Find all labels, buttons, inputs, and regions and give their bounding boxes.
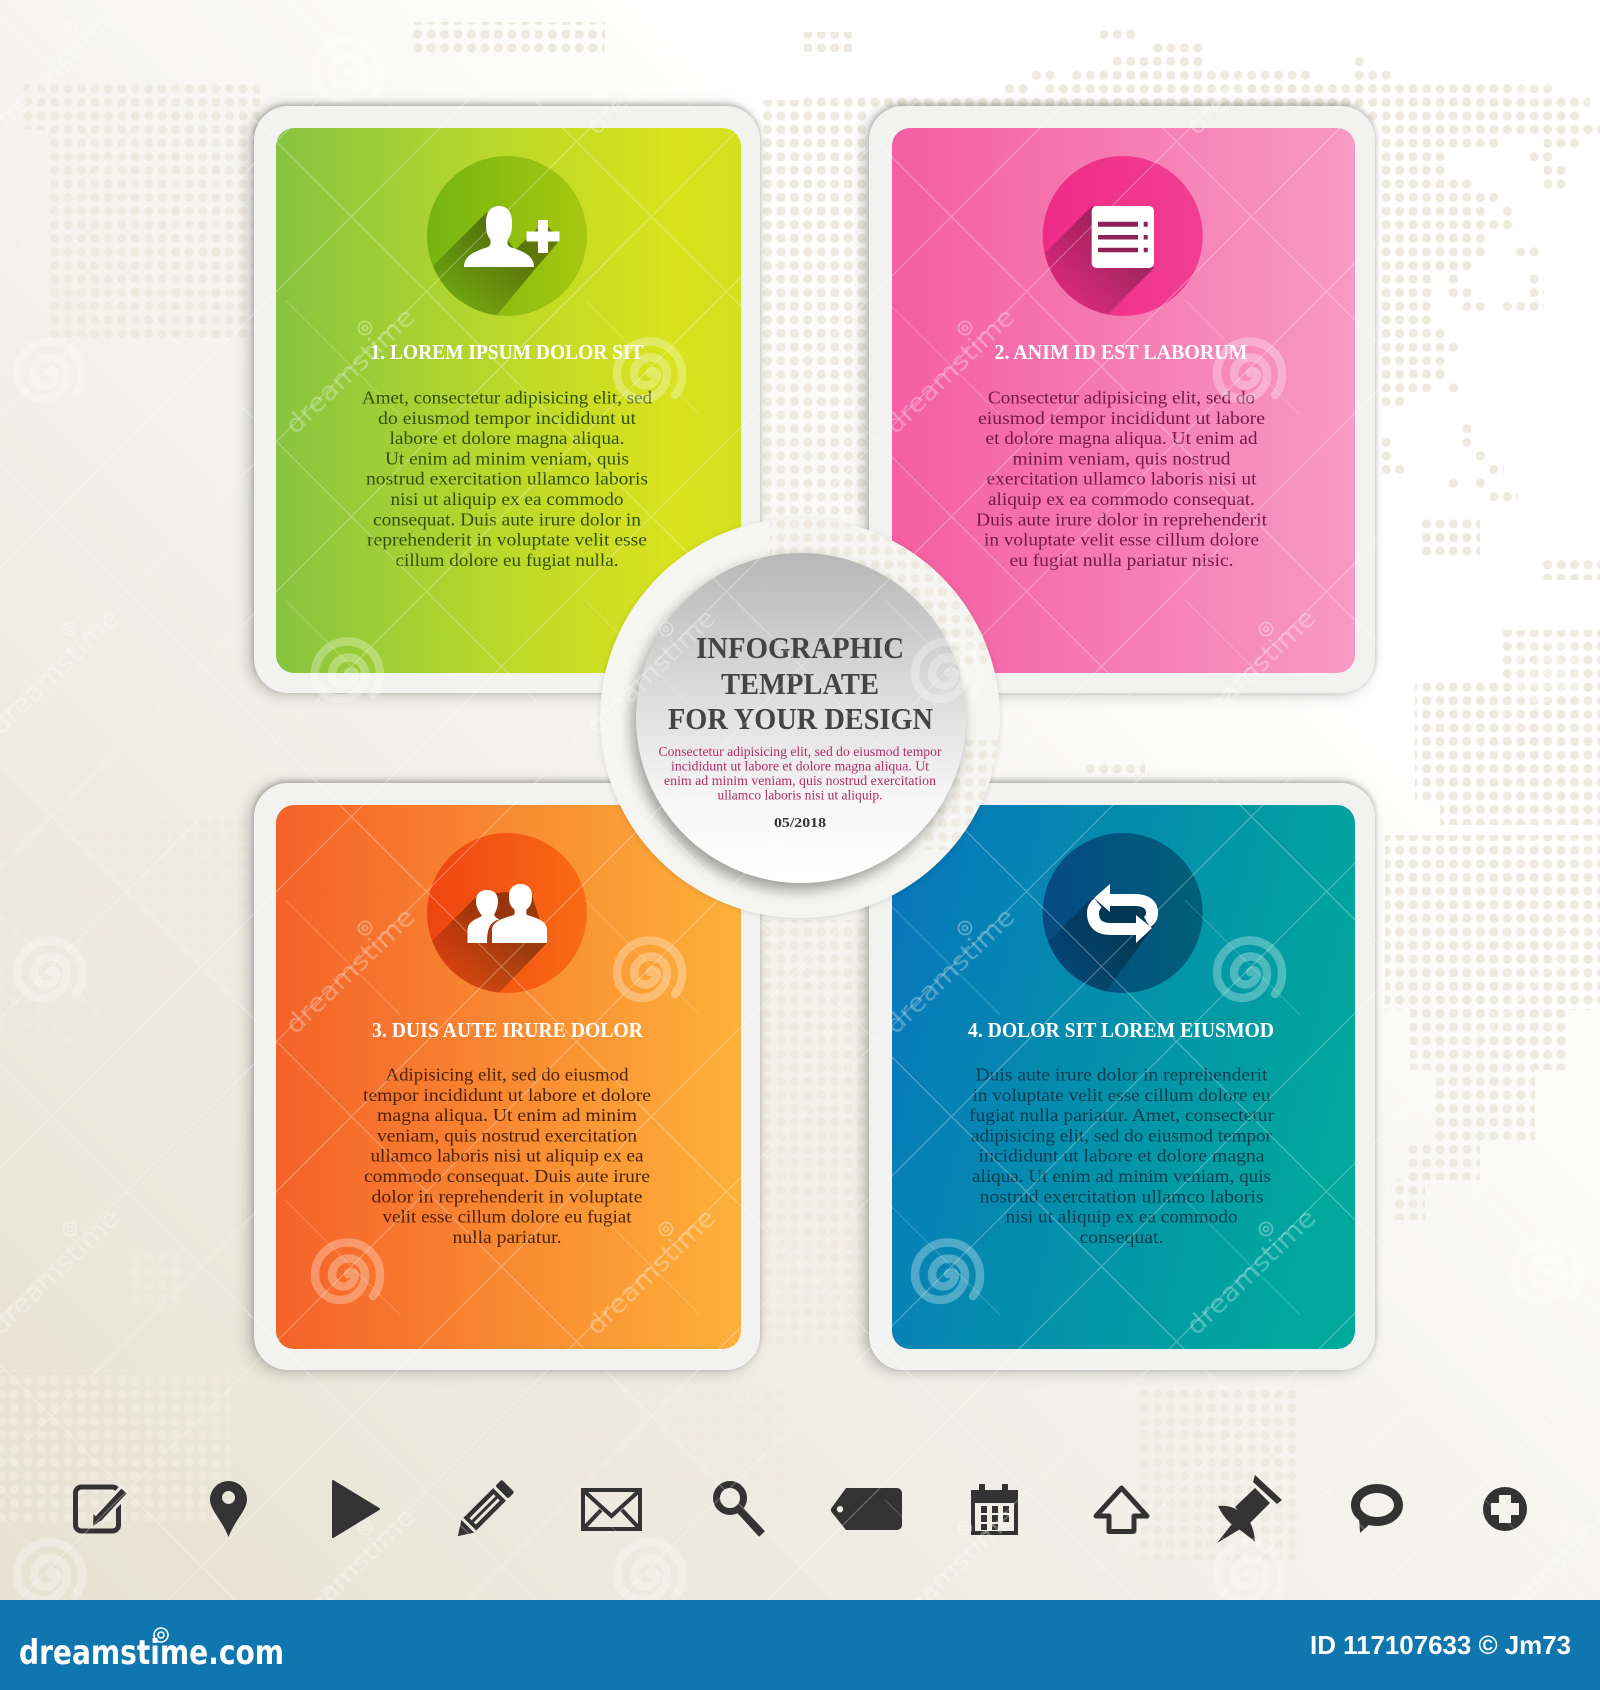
icon: pencil — [451, 1480, 514, 1543]
footer logo: dreamstime.com — [19, 1633, 284, 1673]
body text 4: in voluptate velit esse cillum dolore eu — [972, 1085, 1270, 1105]
panel 3: orange card — [276, 805, 741, 1349]
watermark wordmarks: dreamstime — [581, 3, 722, 141]
body text 2: aliquip ex ea commodo consequat. — [988, 489, 1255, 509]
body text 4: Duis aute irure dolor in reprehenderit — [976, 1064, 1268, 1084]
heading 3: 3. DUIS AUTE IRURE DOLOR — [372, 1018, 644, 1042]
hub title — [668, 630, 933, 736]
watermark wordmarks: dreamstime — [581, 1203, 722, 1341]
watermark wordmarks: dreamstime — [880, 902, 1021, 1040]
icon row — [76, 1475, 1527, 1543]
heading 4: 4. DOLOR SIT LOREM EIUSMOD — [968, 1018, 1274, 1042]
icon: envelope — [583, 1490, 640, 1529]
body text 3: nulla pariatur. — [452, 1227, 562, 1247]
panel 1 frame — [254, 106, 760, 693]
hub description — [658, 745, 942, 804]
hub title: TEMPLATE — [721, 666, 879, 701]
body text 4 — [969, 1064, 1274, 1247]
icon: repeat arrows — [1042, 833, 1203, 993]
body text 1: Amet, consectetur adipisicing elit, sed — [362, 388, 652, 408]
body text 1: labore et dolore magna aliqua. — [390, 428, 624, 448]
watermark wordmarks: dreamstime — [880, 302, 1021, 440]
body text 1: nostrud exercitation ullamco laboris — [366, 469, 648, 489]
hub date: 05/2018 — [774, 816, 826, 831]
panel 2: pink card — [892, 128, 1355, 673]
watermark wordmarks: dreamstime — [1181, 3, 1322, 141]
body text 1: cillum dolore eu fugiat nulla. — [396, 550, 618, 570]
hub title: INFOGRAPHIC — [696, 630, 904, 665]
body text 3: dolor in reprehenderit in voluptate — [372, 1186, 643, 1206]
watermark wordmarks: dreamstime — [280, 1502, 421, 1640]
watermark wordmarks: dreamstime — [880, 1502, 1021, 1640]
panel 3 frame — [254, 783, 760, 1370]
panel 1: green card — [276, 128, 741, 673]
icon: up arrow — [1096, 1488, 1147, 1532]
hub description: enim ad minim veniam, quis nostrud exercitation — [664, 774, 936, 789]
footer bar — [0, 1600, 1600, 1690]
icon: list — [1042, 156, 1203, 316]
hub title: FOR YOUR DESIGN — [668, 701, 933, 736]
icon: two people — [427, 833, 587, 993]
body text 3: veniam, quis nostrud exercitation — [377, 1125, 637, 1145]
body text 4: incididunt ut labore et dolore magna — [978, 1146, 1265, 1166]
watermark wordmarks: dreamstime — [280, 902, 421, 1040]
icon: edit — [76, 1487, 124, 1531]
icon: price tag — [831, 1488, 902, 1530]
watermark wordmarks: dreamstime — [1181, 1203, 1322, 1341]
icon: plus circle — [1483, 1487, 1527, 1531]
body text 3: ullamco laboris nisi ut aliquip ex ea — [370, 1146, 644, 1166]
body text 2: minim veniam, quis nostrud — [1012, 448, 1230, 468]
body text 2 — [976, 388, 1267, 570]
body text 3: tempor incididunt ut labore et dolore — [363, 1085, 651, 1105]
icon: map pin — [210, 1481, 247, 1537]
watermark wordmarks: dreamstime — [280, 302, 421, 440]
watermark wordmarks: dreamstime — [1181, 603, 1322, 741]
body text 1: consequat. Duis aute irure dolor in — [373, 509, 641, 529]
icon: calendar — [971, 1484, 1018, 1535]
body text 4: adipisicing elit, sed do eiusmod tempor — [971, 1125, 1272, 1145]
body text 1: Ut enim ad minim veniam, quis — [385, 448, 629, 468]
body text 1: do eiusmod tempor incididunt ut — [378, 408, 636, 428]
body text 2: Duis aute irure dolor in reprehenderit — [976, 509, 1267, 529]
hub description: Consectetur adipisicing elit, sed do eiusmod tempor — [658, 745, 942, 760]
body text 2: in voluptate velit esse cillum dolore — [984, 530, 1259, 550]
body text 1: reprehenderit in voluptate velit esse — [367, 530, 647, 550]
body text 4: nostrud exercitation ullamco laboris — [980, 1186, 1264, 1206]
body text 1: nisi ut aliquip ex ea commodo — [390, 489, 624, 509]
body text 3: commodo consequat. Duis aute irure — [364, 1166, 650, 1186]
body text 1 — [362, 388, 652, 570]
center hub — [600, 515, 1010, 918]
body text 2: eu fugiat nulla pariatur nisic. — [1010, 550, 1234, 570]
body text 4: consequat. — [1080, 1227, 1164, 1247]
body text 2: Consectetur adipisicing elit, sed do — [988, 388, 1255, 408]
panel 4: teal card — [892, 805, 1355, 1349]
body text 3: velit esse cillum dolore eu fugiat — [382, 1207, 632, 1227]
body text 4: fugiat nulla pariatur. Amet, consectetur — [969, 1105, 1274, 1125]
body text 2: exercitation ullamco laboris nisi ut — [986, 469, 1256, 489]
heading 2: 2. ANIM ID EST LABORUM — [994, 340, 1248, 364]
panel 4 frame — [869, 783, 1375, 1370]
footer image id: ID 117107633 © Jm73 — [1310, 1630, 1571, 1660]
body text 4: aliqua. Ut enim ad minim veniam, quis — [972, 1166, 1271, 1186]
icon: search — [716, 1484, 762, 1534]
hub description: ullamco laboris nisi ut aliquip. — [718, 788, 882, 804]
icon: play — [333, 1481, 379, 1537]
body text 4: nisi ut aliquip ex ea commodo — [1006, 1207, 1238, 1227]
hub description: incididunt ut labore et dolore magna aliqua. Ut — [671, 760, 929, 774]
watermark wordmarks: dreamstime — [581, 603, 722, 741]
icon: speech bubble — [1356, 1488, 1398, 1533]
body text 3: Adipisicing elit, sed do eiusmod — [386, 1064, 628, 1084]
icon: push pin — [1217, 1475, 1282, 1543]
body text 2: eiusmod tempor incididunt ut labore — [978, 408, 1265, 428]
body text 3: magna aliqua. Ut enim ad minim — [377, 1105, 637, 1125]
heading 1: 1. LOREM IPSUM DOLOR SIT — [370, 340, 644, 364]
body text 3 — [363, 1064, 651, 1247]
icon: add user — [427, 156, 587, 316]
panel 2 frame — [869, 106, 1375, 693]
body text 2: et dolore magna aliqua. Ut enim ad — [986, 428, 1258, 448]
